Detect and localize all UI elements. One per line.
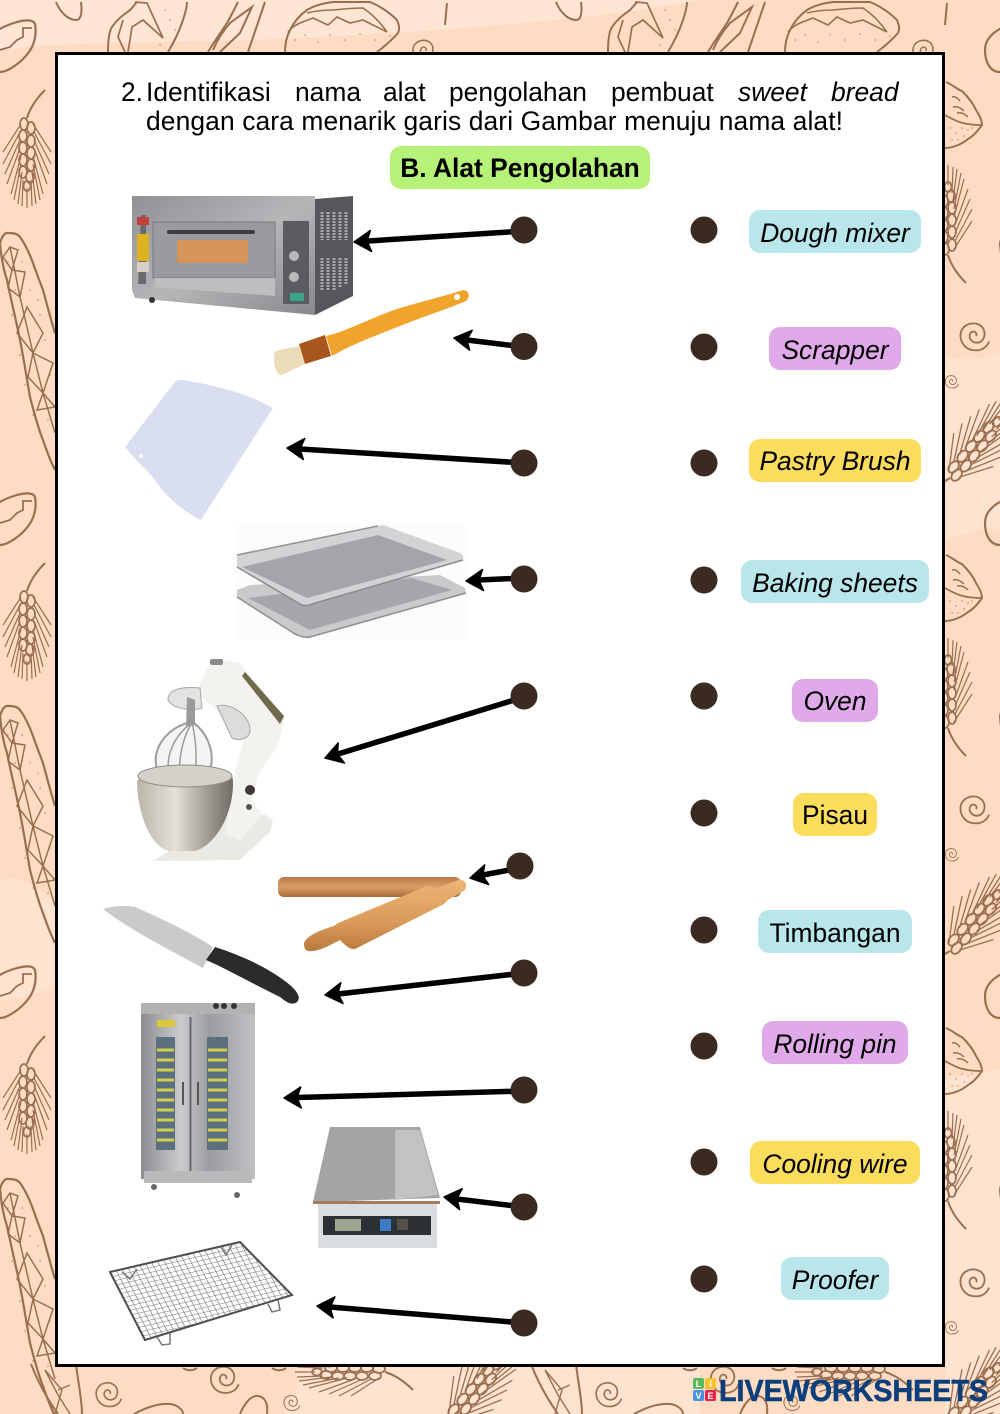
left answer dots (506, 216, 538, 1336)
label: Rolling pin: Rolling pin (773, 1029, 897, 1059)
arrow: scale (444, 1189, 524, 1210)
instruction text: nama (295, 77, 361, 107)
label: Dough mixer: Dough mixer (760, 218, 911, 248)
arrow: mixer (325, 697, 524, 763)
label: Proofer: Proofer (792, 1265, 879, 1295)
instruction text: sweet (738, 77, 809, 107)
instruction text: 2. (121, 77, 143, 107)
matching arrows (284, 230, 524, 1323)
arrow: knife (325, 973, 524, 1004)
label: Rolling pin (762, 1021, 908, 1064)
label: Pastry Brush (749, 439, 921, 482)
heading: B. Alat Pengolahan (390, 146, 650, 189)
label: Oven: Oven (803, 686, 867, 716)
label: Baking sheets (741, 560, 929, 603)
label: Scrapper: Scrapper (781, 335, 890, 365)
label: Timbangan (758, 910, 912, 953)
label: Pisau (793, 793, 877, 836)
instruction text: dengan cara menarik garis dari Gambar menuju nama alat! (146, 106, 843, 136)
liveworksheets logo: I (709, 1379, 712, 1389)
label: Timbangan: Timbangan (769, 918, 901, 948)
right answer dots (690, 216, 718, 1292)
instruction text: pengolahan (449, 77, 587, 107)
label: Baking sheets: Baking sheets (752, 568, 918, 598)
arrow: oven (354, 230, 524, 252)
image: cooling wire rack (110, 1242, 292, 1345)
image: digital scale (313, 1127, 440, 1248)
liveworksheets logo: L (696, 1379, 702, 1389)
image: chef knife (103, 906, 299, 1004)
liveworksheets logo: E (707, 1391, 714, 1401)
label: Pisau: Pisau (802, 800, 868, 830)
image: rolling pins (278, 877, 466, 951)
arrow: brush (454, 330, 524, 350)
arrow: rolling pin (470, 865, 520, 884)
label: Proofer (781, 1257, 889, 1300)
image: pastry brush (274, 290, 469, 375)
label: Pastry Brush: Pastry Brush (759, 446, 911, 476)
image: oven (132, 196, 353, 315)
arrow: baking sheets (466, 570, 524, 590)
heading: B. Alat Pengolahan: B. Alat Pengolahan (400, 153, 640, 183)
instruction text: alat (383, 77, 426, 107)
image: plastic scraper (125, 380, 273, 520)
arrow: scraper (287, 438, 524, 463)
liveworksheets logo: V (695, 1391, 702, 1401)
image: baking sheets (236, 525, 466, 640)
label: Scrapper (769, 327, 901, 370)
arrow: proofer (284, 1087, 524, 1108)
image: proofer cabinet (141, 1003, 255, 1198)
label: Cooling wire (750, 1141, 920, 1184)
label: Dough mixer (749, 210, 921, 253)
arrow: cooling rack (317, 1297, 524, 1323)
label: Cooling wire: Cooling wire (762, 1149, 908, 1179)
instruction text (121, 77, 900, 136)
label: Oven (792, 679, 878, 722)
instruction text: Identifikasi (146, 77, 271, 107)
image: stand mixer (137, 658, 285, 861)
instruction text: pembuat (611, 77, 714, 107)
instruction text: bread (831, 77, 900, 107)
